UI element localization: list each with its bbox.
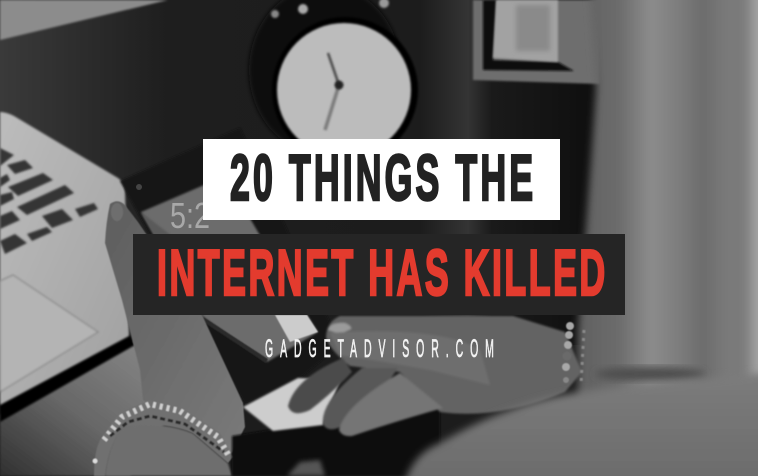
title line 2: INTERNET HAS KILLED bbox=[157, 238, 605, 310]
wristwatch bbox=[92, 400, 233, 476]
left hand holding phone bbox=[105, 201, 245, 457]
paper under fingers bbox=[243, 378, 340, 431]
trackpad bbox=[0, 275, 98, 392]
laptop bbox=[0, 112, 135, 422]
lock-screen clock text: 5:2 bbox=[170, 195, 210, 236]
picture frame bbox=[473, 0, 600, 84]
right hand bbox=[288, 316, 582, 436]
phone bbox=[120, 128, 340, 404]
top-left light surface bbox=[0, 0, 168, 40]
bracelet bbox=[562, 322, 584, 385]
blurred hair foreground bbox=[578, 0, 758, 400]
blurred shoulder bbox=[403, 372, 758, 476]
dark desk corner bbox=[232, 405, 440, 476]
website url: GADGETADVISOR.COM bbox=[265, 336, 494, 364]
title line 1: 20 THINGS THE bbox=[230, 143, 533, 215]
sleeve bbox=[105, 425, 232, 476]
desk surface bbox=[0, 340, 180, 476]
keyboard keys bbox=[0, 148, 98, 254]
alarm clock bbox=[249, 0, 418, 163]
